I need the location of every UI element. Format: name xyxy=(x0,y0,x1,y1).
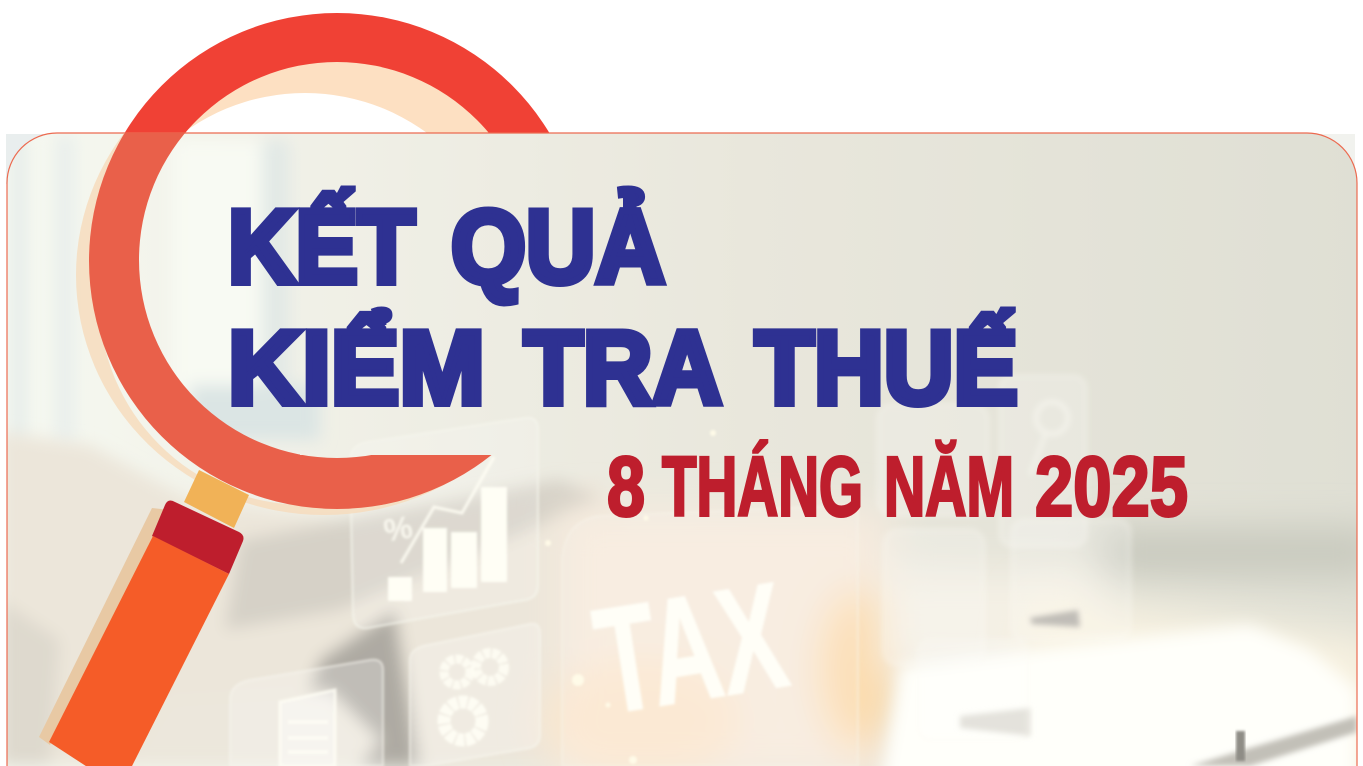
handle collar xyxy=(152,501,244,574)
subtitle: 2025 xyxy=(1035,440,1188,534)
image corner tint right xyxy=(1307,134,1355,184)
image corner tint left xyxy=(6,134,56,184)
subtitle: NĂM xyxy=(884,440,1014,534)
icon card: chart: % xyxy=(381,508,415,549)
sparkles xyxy=(545,430,716,764)
icon card: document xyxy=(230,660,383,766)
title line 2: TRA xyxy=(524,310,722,426)
title line 2: THUẾ xyxy=(755,310,1018,426)
handle shadow xyxy=(39,508,170,745)
magnifier ring behind panel xyxy=(125,13,549,132)
title line 1 xyxy=(228,190,665,306)
title line 1: QUẢ xyxy=(451,190,665,306)
icon card: gears xyxy=(410,624,540,766)
title line 2 xyxy=(228,310,1018,426)
handle grip xyxy=(49,536,229,766)
binder clip xyxy=(960,610,1357,766)
icon card: TAX xyxy=(562,582,860,754)
warm glow and desk xyxy=(540,510,1363,766)
icon cards: right column xyxy=(878,376,1130,740)
ring inside panel xyxy=(89,133,492,509)
subtitle xyxy=(607,440,1188,534)
hand and sleeve xyxy=(0,432,640,766)
binder clip post xyxy=(1236,731,1245,761)
TAX lettering: TAX xyxy=(585,550,797,746)
ring shadow inside panel xyxy=(76,133,448,515)
title line 2: KIỂM xyxy=(228,310,485,426)
title line 1: KẾT xyxy=(228,190,415,306)
subtitle: 8 xyxy=(607,440,645,534)
subtitle: THÁNG xyxy=(662,440,863,534)
icon card: chart xyxy=(350,456,540,630)
magnifying glass xyxy=(39,133,492,766)
handle neck xyxy=(184,470,249,528)
